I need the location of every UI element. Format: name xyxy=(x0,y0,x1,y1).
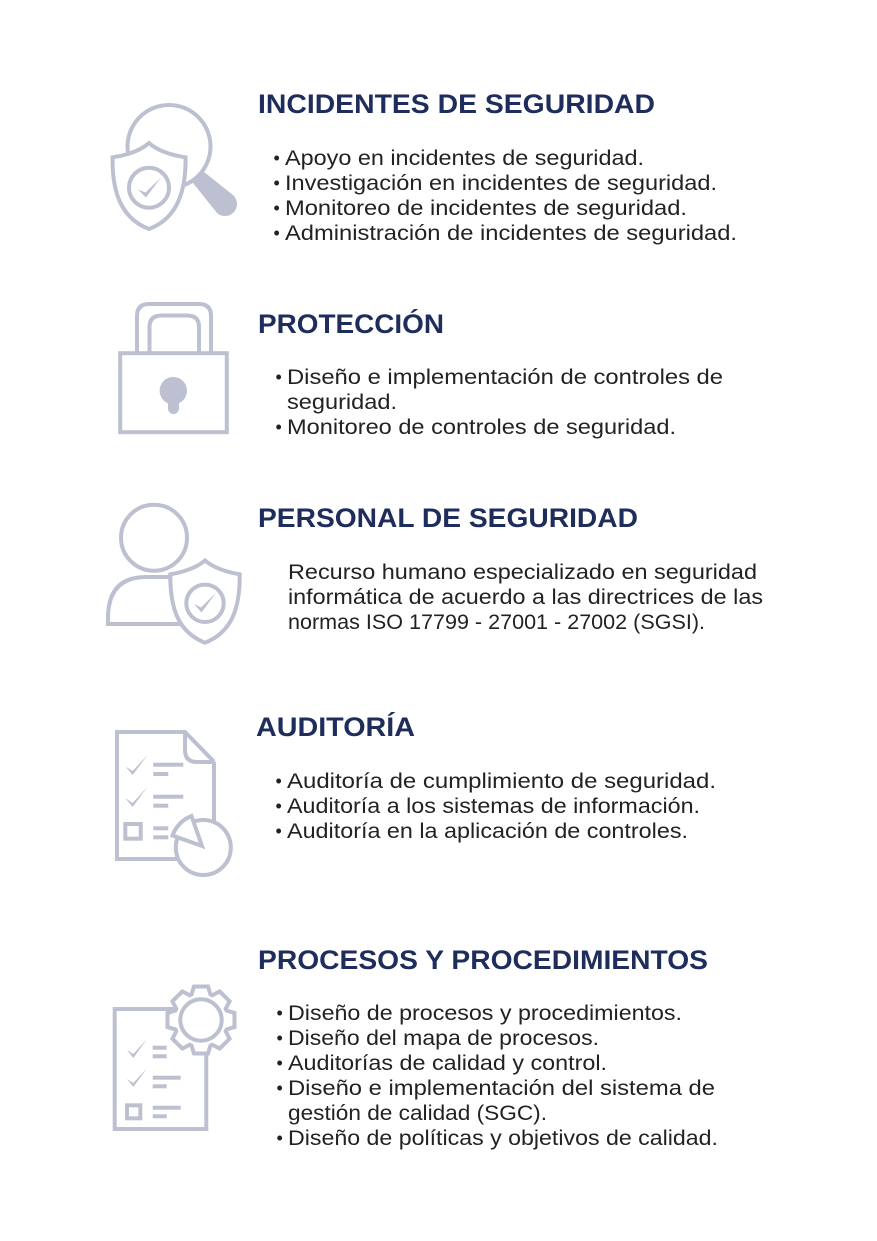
bullet list: • xyxy=(276,1053,283,1073)
bullet list: • xyxy=(276,1078,283,1098)
heading: PERSONAL DE SEGURIDAD xyxy=(258,503,638,533)
bullet list: Apoyo en incidentes de seguridad. xyxy=(285,147,644,170)
panel: auditoría xyxy=(117,711,716,875)
bullet list: Auditoría de cumplimiento de seguridad. xyxy=(287,770,716,793)
bullet list: Diseño de políticas y objetivos de calidad. xyxy=(288,1127,718,1150)
bullet list: • xyxy=(274,173,280,193)
bullet list: • xyxy=(276,771,282,791)
heading: PROTECCIÓN xyxy=(258,308,444,339)
bullet list: Diseño e implementación del sistema de xyxy=(288,1077,715,1100)
heading: PROCESOS Y PROCEDIMIENTOS xyxy=(258,945,708,975)
text block xyxy=(288,561,763,634)
panel: procesos y procedimientos xyxy=(115,945,718,1150)
bullet list: Auditoría a los sistemas de información. xyxy=(287,795,700,818)
bullet list: • xyxy=(276,1028,283,1048)
bullet list xyxy=(276,1002,718,1150)
bullet list: • xyxy=(276,796,282,816)
bullet list: Auditorías de calidad y control. xyxy=(288,1052,607,1075)
icon: audit document with pie chart xyxy=(117,732,231,875)
heading: AUDITORÍA xyxy=(256,711,415,742)
bullet list: Monitoreo de controles de seguridad. xyxy=(287,416,676,439)
icon: padlock xyxy=(120,304,227,432)
bullet list: Auditoría en la aplicación de controles. xyxy=(287,820,688,843)
panel: incidentes de seguridad xyxy=(113,89,737,245)
bullet list: Investigación en incidentes de seguridad. xyxy=(285,172,717,195)
bullet list: • xyxy=(274,148,280,168)
bullet list: • xyxy=(276,821,282,841)
bullet list: Diseño del mapa de procesos. xyxy=(288,1027,599,1050)
panel: personal de seguridad xyxy=(108,503,763,643)
heading: INCIDENTES DE SEGURIDAD xyxy=(258,89,655,119)
icon: magnifier with shield xyxy=(113,105,237,229)
bullet list: • xyxy=(276,367,282,387)
bullet list: seguridad. xyxy=(287,391,397,414)
bullet list: • xyxy=(276,417,282,437)
bullet list: Administración de incidentes de seguridad. xyxy=(285,222,737,245)
bullet list: Diseño e implementación de controles de xyxy=(287,366,723,389)
bullet list xyxy=(276,770,716,843)
bullet list: • xyxy=(276,1128,283,1148)
bullet list xyxy=(276,366,723,439)
panel: protección xyxy=(120,304,723,439)
text block: informática de acuerdo a las directrices de las xyxy=(288,586,763,609)
text block: normas ISO 17799 - 27001 - 27002 (SGSI). xyxy=(288,611,705,634)
icon: person with shield xyxy=(108,505,240,643)
text block: Recurso humano especializado en seguridad xyxy=(288,561,757,584)
bullet list: • xyxy=(276,1003,283,1023)
bullet list: Diseño de procesos y procedimientos. xyxy=(288,1002,682,1025)
bullet list: gestión de calidad (SGC). xyxy=(288,1102,547,1125)
bullet list xyxy=(274,147,737,245)
icon: checklist with gear xyxy=(115,986,234,1129)
bullet list: Monitoreo de incidentes de seguridad. xyxy=(285,197,687,220)
bullet list: • xyxy=(274,198,280,218)
bullet list: • xyxy=(274,223,280,243)
